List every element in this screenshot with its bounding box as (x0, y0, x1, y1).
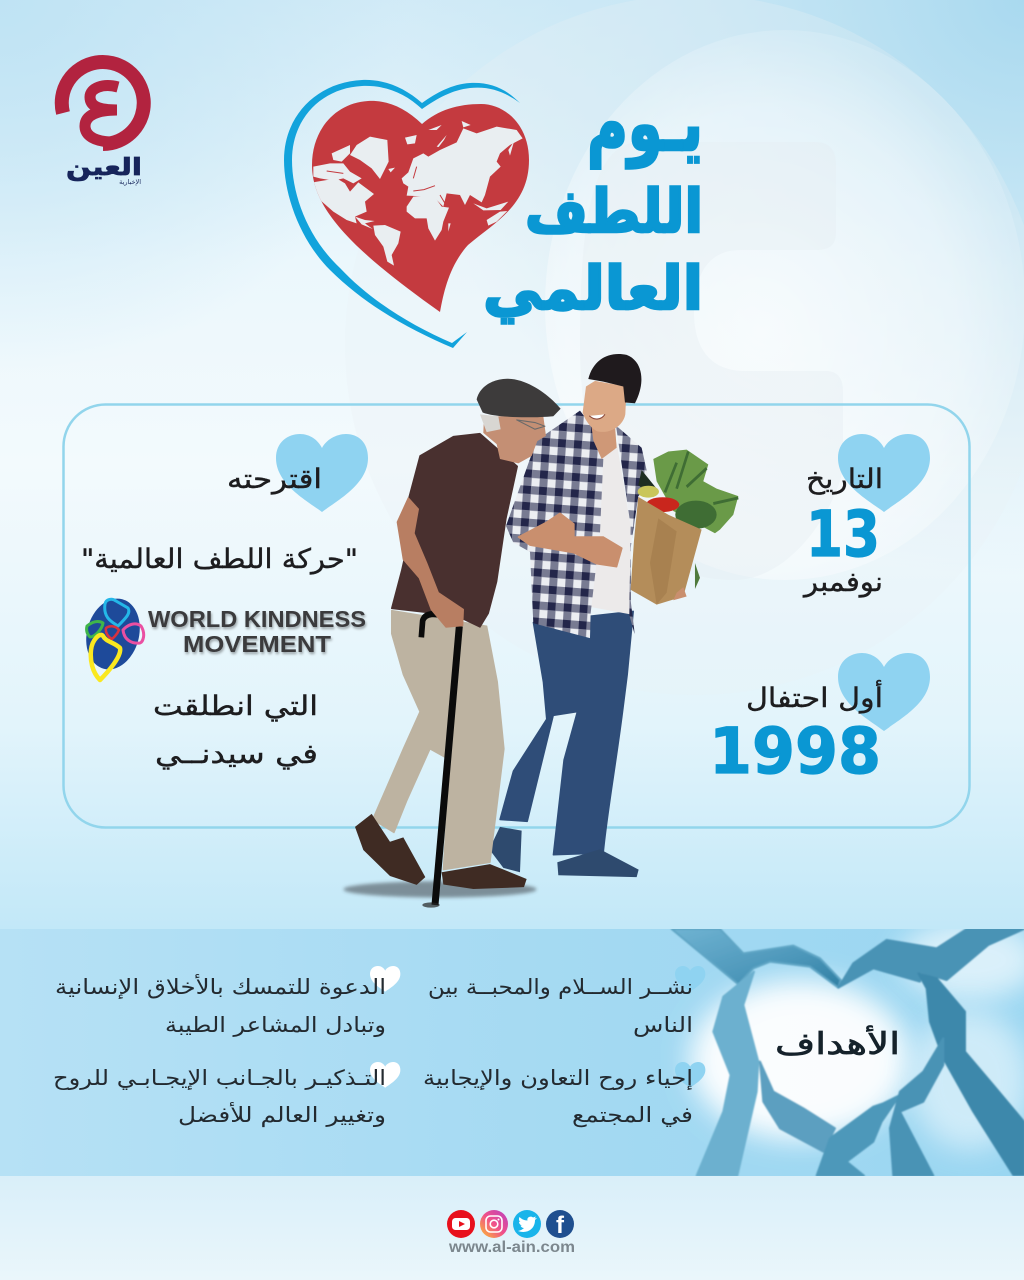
icon: facebook: f (556, 1212, 565, 1239)
young man jeans (500, 611, 633, 855)
goal: peace and love (428, 975, 693, 1037)
illustration: world heart (284, 80, 529, 348)
young man forearm (518, 513, 622, 567)
elder shirt (392, 434, 517, 627)
goal: peace and love: نشــر الســلام والمحبــة بين (428, 975, 693, 999)
tomatoes (646, 497, 679, 512)
logo wordmark: العين (66, 153, 142, 181)
icon: youtube (447, 1210, 475, 1238)
page background (0, 0, 1024, 930)
paper bag (631, 497, 702, 605)
elder hair (480, 414, 501, 432)
ground shadow (343, 881, 537, 898)
proposed label: اقترحته (227, 464, 322, 495)
elder trousers (373, 611, 504, 870)
young man face (583, 381, 627, 432)
text block: proposed by (81, 464, 358, 770)
wordmark line 2: MOVEMENT (183, 631, 331, 657)
icon: facebook (546, 1210, 574, 1239)
wordmark line 1: WORLD KINDNESS (148, 606, 366, 632)
title (483, 79, 703, 324)
footer (0, 1176, 1024, 1280)
date label: التاريخ (806, 464, 883, 495)
logo: Al-Ain (62, 62, 144, 186)
text block: first celebration (709, 679, 883, 788)
photo: elder and young man walking (343, 354, 738, 908)
map gaps (327, 167, 446, 205)
panel: info frame (64, 404, 970, 828)
logo ring (62, 62, 144, 144)
heart: proposed by (276, 434, 368, 512)
heart: date (838, 434, 930, 512)
first celebration label: أول احتفال (746, 679, 883, 714)
greens (653, 450, 738, 533)
first celebration year: 1998 (709, 715, 881, 788)
elder arm (397, 498, 463, 627)
goal: positive side: التـذكيـر بالجـانب الإيجـابـي للروح (53, 1066, 386, 1090)
carrot tops (665, 452, 738, 504)
goal: cooperation: في المجتمع (572, 1103, 693, 1127)
bullet heart right 2 (675, 1062, 705, 1088)
world map (313, 121, 523, 266)
heart: first celebration (838, 653, 930, 731)
elder neck and head (483, 416, 546, 463)
cane tip (422, 902, 440, 908)
goal: cooperation (423, 1066, 693, 1127)
date month: نوفمبر (802, 567, 883, 598)
walking cane (421, 614, 459, 905)
cucumber (638, 470, 657, 492)
young man smile (589, 414, 605, 419)
text block: date (802, 464, 883, 598)
red heart (312, 101, 529, 312)
title line 1: يـوم (587, 79, 703, 169)
hanging leaf (695, 563, 700, 589)
young man shoes (489, 827, 639, 877)
band heading: الأهداف (775, 1024, 900, 1062)
title line 2: اللطف (525, 177, 703, 247)
goal: humane morals: وتبادل المشاعر الطيبة (165, 1013, 386, 1037)
young man t-shirt (590, 442, 631, 614)
young man hair (588, 354, 641, 403)
goal: positive side (53, 1066, 386, 1128)
yellow pepper (638, 486, 659, 498)
title line 3: العالمي (483, 254, 703, 324)
young man neck (592, 425, 617, 459)
logo tagline: الإخبارية (119, 178, 141, 186)
Sydney text: في سيدنــي (155, 739, 318, 770)
band background (0, 929, 1024, 1176)
elder cap (477, 379, 561, 417)
bag shading (650, 518, 677, 605)
goal: cooperation: إحياء روح التعاون والإيجابية (423, 1066, 693, 1091)
broccoli (675, 501, 717, 529)
icon: instagram (480, 1210, 508, 1238)
bullet heart right 1 (675, 966, 705, 992)
goals band (0, 920, 1024, 1176)
goal: peace and love: الناس (633, 1013, 693, 1037)
goal: humane morals: الدعوة للتمسك بالأخلاق الإنسانية (55, 974, 386, 999)
website url: www.al-ain.com (448, 1239, 575, 1256)
logo: World Kindness Movement (79, 592, 366, 680)
bullet heart left 1 (370, 966, 400, 992)
young man shirt (506, 411, 650, 638)
grocery bag (631, 450, 738, 605)
icon: twitter (513, 1210, 541, 1238)
elder shoes (355, 814, 527, 889)
goal: positive side: وتغيير العالم للأفضل (178, 1102, 386, 1128)
movement name: "حركة اللطف العالمية" (81, 544, 358, 575)
elder glasses (517, 420, 545, 429)
launched text: التي انطلقت (153, 691, 318, 722)
bullet heart left 2 (370, 1062, 400, 1088)
logo letter (85, 86, 118, 142)
band photo: heart hands (672, 920, 1024, 1176)
footer background (0, 1176, 1024, 1280)
hearts emblem (79, 592, 147, 680)
holding hand (673, 587, 687, 600)
heart outline (284, 80, 520, 348)
date number: 13 (806, 498, 880, 571)
goal: humane morals (55, 974, 386, 1037)
